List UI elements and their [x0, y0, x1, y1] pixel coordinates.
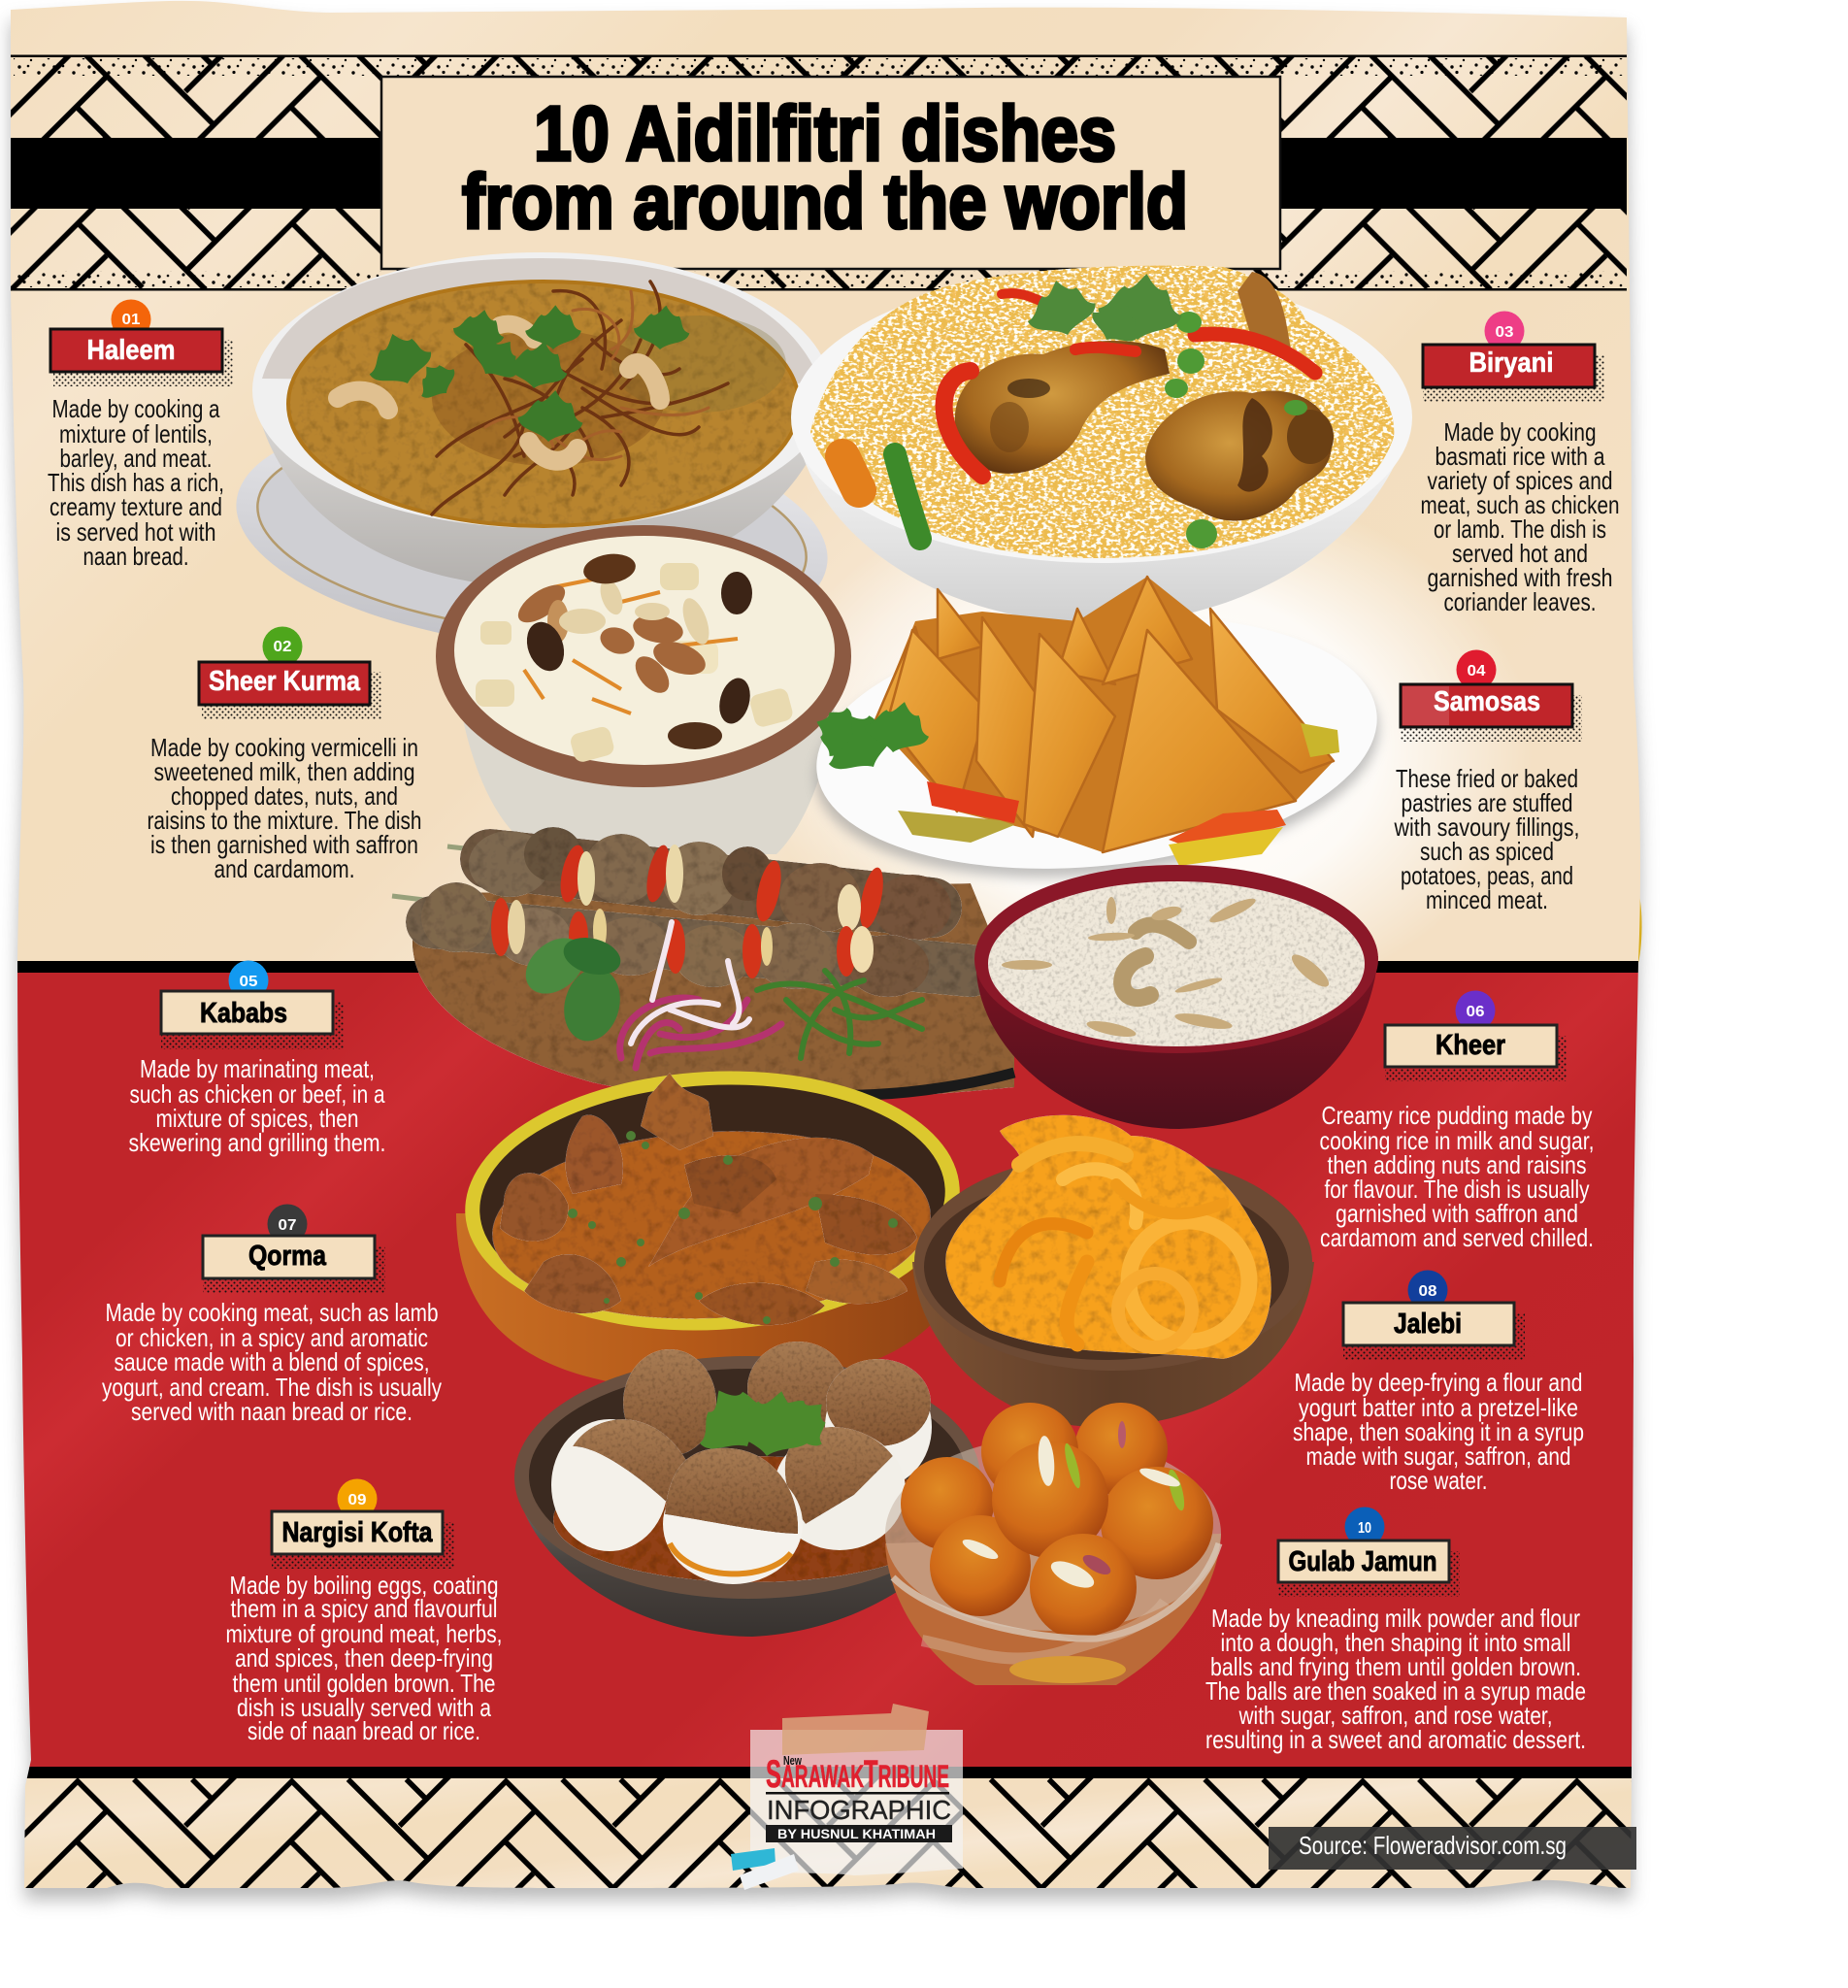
text: Nargisi Kofta description: them until golden brown. The [233, 1669, 495, 1698]
text: Kheer description: Creamy rice pudding made by [1322, 1101, 1592, 1130]
text: Samosas description: pastries are stuffed [1402, 788, 1572, 817]
label: 03 Biryani [1423, 311, 1604, 402]
label: 03 Biryani: 03 [1495, 324, 1514, 341]
pickled vegetables [898, 723, 1339, 866]
bottom herringbone band [0, 1778, 1669, 1895]
label: 04 Samosas [1401, 650, 1582, 742]
cilantro garnish [681, 1373, 842, 1466]
text: Kheer description: cooking rice in milk and sugar, [1320, 1126, 1594, 1155]
text: Gulab Jamun description: into a dough, then shaping it into small [1221, 1628, 1570, 1657]
label: 07 Qorma: Qorma [248, 1241, 327, 1272]
text: Sheer Kurma description: is then garnished with saffron [150, 830, 418, 859]
text: Kababs description: Made by marinating meat, [140, 1054, 375, 1083]
text: Haleem description: Made by cooking a [52, 394, 220, 423]
text: Nargisi Kofta description: side of naan bread or rice. [248, 1716, 480, 1745]
text: Jalebi description: made with sugar, saffron, and [1306, 1441, 1570, 1471]
text: Biryani description [1421, 417, 1619, 616]
source credit bar: Source: Floweradvisor.com.sg [1299, 1831, 1567, 1860]
text: Qorma description: or chicken, in a spicy and aromatic [116, 1323, 428, 1352]
label: 05 Kababs: Kababs [200, 998, 287, 1029]
skewer row 1 [469, 827, 951, 941]
text: Biryani description: meat, such as chicken [1421, 490, 1619, 519]
text: Haleem description: barley, and meat. [60, 444, 212, 473]
text: Nargisi Kofta description: dish is usually served with a [237, 1693, 491, 1722]
text: Qorma description [102, 1298, 442, 1426]
text: Kheer description: for flavour. The dish is usually [1324, 1175, 1590, 1204]
text: Biryani description: or lamb. The dish is [1434, 514, 1606, 544]
logo: New Sarawak Tribune infographic: BY HUSNUL KHATIMAH [777, 1826, 936, 1841]
text: Kababs description: skewering and grilling them. [128, 1128, 386, 1157]
text: Gulab Jamun description: Made by kneading milk powder and flour [1211, 1604, 1580, 1633]
text: Nargisi Kofta description: mixture of ground meat, herbs, [225, 1619, 503, 1648]
dish: jalebi [912, 1115, 1314, 1427]
text: Sheer Kurma description [148, 733, 421, 883]
almonds and raisins [512, 578, 710, 699]
label: 09 Nargisi Kofta [272, 1479, 454, 1569]
label: 06 Kheer: 06 [1466, 1004, 1485, 1020]
label: 02 Sheer Kurma: 02 [274, 639, 292, 655]
dish: nargisi kofta [514, 1342, 982, 1637]
label: 10 Gulab Jamun: 10 [1358, 1520, 1371, 1537]
cashews [338, 324, 660, 461]
label: 09 Nargisi Kofta: 09 [347, 1492, 367, 1508]
panel: red lower section [0, 973, 1669, 1769]
text: Gulab Jamun description [1205, 1604, 1586, 1754]
label: 08 Jalebi [1343, 1270, 1525, 1360]
text: Biryani description: Made by cooking [1444, 417, 1596, 447]
title box [381, 77, 1280, 269]
label: 04 Samosas: 04 [1468, 663, 1486, 679]
text: Haleem description: is served hot with [56, 517, 215, 547]
top pattern band [11, 54, 1627, 291]
arugula [757, 971, 922, 1058]
cilantro [359, 303, 692, 445]
label: 05 Kababs [161, 961, 344, 1049]
dish: kababs [392, 827, 1014, 1101]
text: Nargisi Kofta description [225, 1571, 503, 1745]
peppers and greens [842, 293, 1315, 539]
tape [782, 1704, 929, 1755]
label: 10 Gulab Jamun: Gulab Jamun [1289, 1546, 1436, 1577]
logo: New Sarawak Tribune infographic [731, 1704, 963, 1890]
label: 06 Kheer [1385, 990, 1567, 1081]
skewer row 2 [421, 882, 971, 997]
text: Biryani description: coriander leaves. [1444, 587, 1596, 616]
text: Jalebi description: yogurt batter into a pretzel-like [1299, 1393, 1578, 1422]
gulab balls [901, 1403, 1213, 1640]
text: Samosas description: These fried or baked [1396, 764, 1578, 793]
soft glow behind samosas [802, 534, 1507, 943]
red onions [620, 922, 781, 1068]
text: Kheer description: garnished with saffron and [1336, 1199, 1578, 1228]
text: Haleem description [48, 394, 224, 571]
parsley [808, 696, 934, 785]
text: Haleem description: creamy texture and [50, 492, 222, 521]
text: Biryani description: garnished with fresh [1427, 563, 1613, 592]
text: Kababs description: mixture of spices, then [155, 1104, 359, 1133]
label: 01 Haleem: 01 [122, 312, 141, 328]
label: 08 Jalebi: Jalebi [1394, 1309, 1462, 1340]
text: Biryani description: variety of spices and [1427, 466, 1613, 495]
text: Qorma description: sauce made with a blend of spices, [115, 1347, 429, 1376]
text: Kababs description: such as chicken or beef, in a [130, 1079, 385, 1109]
text: Samosas description: minced meat. [1426, 885, 1548, 914]
text: Jalebi description: shape, then soaking it in a syrup [1293, 1417, 1584, 1446]
text: Kheer description: cardamom and served chilled. [1320, 1223, 1594, 1252]
text: Jalebi description: Made by deep-frying a flour and [1295, 1368, 1582, 1397]
label: 02 Sheer Kurma [199, 627, 381, 719]
text: Gulab Jamun description: balls and frying them until golden brown. [1210, 1652, 1581, 1681]
label: 07 Qorma: 07 [278, 1217, 297, 1234]
text: Nargisi Kofta description: Made by boiling eggs, coating [229, 1571, 499, 1600]
title: 10 Aidilfitri dishes [534, 90, 1116, 177]
dish: biryani [791, 266, 1412, 624]
text: Haleem description: This dish has a rich, [48, 468, 224, 497]
text: Gulab Jamun description: The balls are then soaked in a syrup made [1205, 1676, 1586, 1706]
herb flecks [568, 1131, 898, 1324]
text: Haleem description: naan bread. [83, 542, 188, 571]
gold edge sliver [1634, 883, 1642, 963]
label: 04 Samosas: Samosas [1434, 686, 1540, 717]
meat chunks [500, 1073, 917, 1325]
label: 10 Gulab Jamun [1278, 1507, 1460, 1597]
text: Qorma description: served with naan bread or rice. [131, 1397, 412, 1426]
text: Biryani description: basmati rice with a [1435, 442, 1605, 471]
orange saffron threads [524, 578, 738, 713]
nut garnish [960, 1421, 1187, 1593]
label: 07 Qorma [203, 1204, 385, 1293]
text: Sheer Kurma description: sweetened milk, then adding [153, 757, 415, 786]
koftas [551, 1342, 932, 1584]
label: 09 Nargisi Kofta: Nargisi Kofta [281, 1517, 433, 1548]
text: Haleem description: mixture of lentils, [59, 419, 213, 448]
dish: sheer kurma [436, 525, 851, 854]
dish: samosas [802, 577, 1392, 904]
text: Sheer Kurma description: chopped dates, nuts, and [171, 781, 398, 811]
title [462, 90, 1188, 245]
label: 01 Haleem: Haleem [87, 335, 175, 366]
text: Sheer Kurma description: Made by cooking vermicelli in [150, 733, 418, 762]
jalebi swirls [1000, 1143, 1249, 1347]
logo: New Sarawak Tribune infographic: New [783, 1753, 803, 1768]
text: Gulab Jamun description: resulting in a sweet and aromatic dessert. [1205, 1725, 1586, 1754]
text: Sheer Kurma description: and cardamom. [214, 854, 355, 883]
cashews and almond slivers [1122, 925, 1189, 998]
text: Samosas description [1394, 764, 1580, 914]
text: Jalebi description: rose water. [1390, 1466, 1487, 1495]
text: Kheer description: then adding nuts and raisins [1328, 1150, 1586, 1179]
label: 05 Kababs: 05 [239, 974, 258, 990]
dates [476, 563, 794, 764]
mint [515, 927, 628, 1047]
text: Kheer description [1320, 1101, 1594, 1252]
dish: haleem [224, 252, 840, 677]
logo: New Sarawak Tribune infographic: INFOGRAPHIC [767, 1795, 951, 1825]
label: 06 Kheer: Kheer [1436, 1030, 1505, 1061]
dish: qorma [456, 1059, 967, 1390]
peppers and onion pieces [491, 843, 887, 978]
title: from around the world [462, 158, 1188, 245]
text: Nargisi Kofta description: and spices, then deep-frying [235, 1643, 493, 1673]
text: Samosas description: such as spiced [1420, 837, 1554, 866]
text: Samosas description: potatoes, peas, and [1401, 861, 1573, 890]
dish: gulab jamun [885, 1403, 1221, 1685]
text: Sheer Kurma description: raisins to the mixture. The dish [148, 806, 421, 835]
text: Qorma description: Made by cooking meat, such as lamb [105, 1298, 439, 1327]
text: Biryani description: served hot and [1452, 539, 1588, 568]
text: Jalebi description [1293, 1368, 1584, 1495]
dish: kheer [974, 865, 1378, 1129]
text: Samosas description: with savoury fillings, [1394, 812, 1580, 842]
label: 01 Haleem [50, 299, 233, 386]
source credit bar [1269, 1827, 1636, 1870]
text: Kababs description [128, 1054, 386, 1157]
label: 02 Sheer Kurma: Sheer Kurma [209, 666, 361, 697]
text: Qorma description: yogurt, and cream. The dish is usually [102, 1373, 442, 1402]
chicken drumsticks [955, 272, 1334, 520]
label: 08 Jalebi: 08 [1419, 1283, 1437, 1300]
text: Nargisi Kofta description: them in a spicy and flavourful [231, 1594, 497, 1623]
label: 03 Biryani: Biryani [1469, 348, 1553, 379]
text: Gulab Jamun description: with sugar, saffron, and rose water, [1238, 1701, 1553, 1730]
logo: New Sarawak Tribune infographic: SARAWAKTRIBUNE [766, 1753, 949, 1796]
